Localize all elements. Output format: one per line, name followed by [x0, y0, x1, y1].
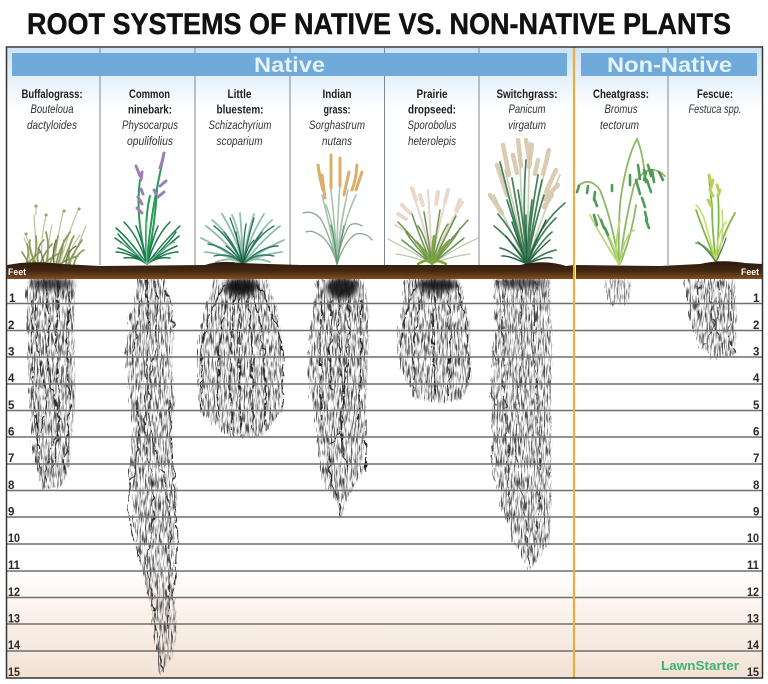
roots: Cheatgrass [606, 279, 632, 305]
roots: Little bluestem [198, 278, 284, 437]
banner: Non-Native [581, 53, 757, 77]
label: Indian grass [309, 87, 365, 148]
label: Common ninebark: ninebark: [128, 102, 172, 116]
label: Switchgrass: virgatum [508, 118, 546, 132]
feet scale: left: 13 [8, 614, 20, 626]
soil band [7, 261, 762, 279]
banner: Native [12, 53, 567, 77]
label: Little bluestem [208, 87, 272, 148]
feet scale: left: 10 [8, 533, 20, 545]
feet scale: left: 1 [9, 293, 16, 305]
root systems [27, 277, 738, 675]
label: Switchgrass: Panicum [508, 102, 546, 116]
feet scale: right: 12 [747, 587, 759, 599]
feet scale: right: 14 [747, 640, 760, 652]
feet scale: right: 3 [753, 346, 759, 358]
banner: Native: Native [254, 54, 325, 77]
label: Prairie dropseed: heterolepis [408, 134, 456, 148]
label: Indian grass: Sorghastrum [309, 118, 365, 132]
feet scale: right [741, 267, 760, 679]
feet scale: left: 4 [8, 373, 15, 385]
label: Cheatgrass: tectorum [600, 118, 639, 132]
feet scale: right: 15 [747, 667, 760, 679]
feet scale: right: Feet [741, 267, 759, 277]
label: Cheatgrass: Bromus [604, 102, 638, 116]
banner: Non-Native: Non-Native [607, 54, 732, 77]
feet scale: right: 10 [747, 533, 759, 545]
label: Prairie dropseed: dropseed: [408, 102, 456, 116]
plant: Indian grass [303, 155, 372, 264]
label: Common ninebark: opulifolius [127, 134, 173, 148]
plant: Fescue [696, 175, 735, 262]
label: Little bluestem: bluestem: [216, 102, 264, 116]
feet scale: left: 14 [8, 640, 21, 652]
feet scale: left: 8 [8, 480, 15, 492]
feet scale: left: 12 [8, 587, 20, 599]
feet scale: left: 15 [8, 667, 21, 679]
label: Common ninebark: Physocarpus [122, 118, 178, 132]
label: Common ninebark [122, 87, 178, 148]
label: Little bluestem: Schizachyrium [208, 118, 272, 132]
feet scale: left: 2 [8, 320, 14, 332]
label: Indian grass: nutans [322, 134, 352, 148]
roots: Common ninebark [125, 279, 178, 675]
plant: Little bluestem [201, 213, 284, 264]
plant: Cheatgrass [577, 139, 665, 264]
label: Switchgrass [496, 87, 558, 132]
orange native divider [573, 47, 575, 678]
feet scale: right: 13 [747, 614, 759, 626]
label: Buffalograss [22, 87, 82, 132]
feet scale: right: 7 [753, 453, 759, 465]
label: Cheatgrass: Cheatgrass: [593, 87, 649, 101]
feet scale: right: 4 [753, 373, 760, 385]
label: Little bluestem: scoparium [216, 134, 262, 148]
feet scale: right: 5 [753, 400, 760, 412]
feet scale: left: 9 [8, 506, 14, 518]
roots: Indian grass [308, 277, 370, 517]
depth grid lines [7, 304, 762, 651]
roots: Switchgrass [491, 278, 553, 570]
plant: Prairie dropseed [388, 188, 478, 264]
label: Indian grass: grass: [324, 102, 350, 116]
label: Common ninebark: Common [129, 87, 170, 101]
feet scale: left: 7 [8, 453, 14, 465]
feet scale: right: 11 [747, 560, 760, 572]
label: Buffalograss: Buffalograss: [22, 87, 82, 101]
label: Prairie dropseed: Sporobolus [408, 118, 456, 132]
plant: Buffalograss [22, 206, 86, 264]
label: Prairie dropseed [408, 87, 456, 148]
feet scale: left: 11 [8, 560, 21, 572]
feet scale: right: 2 [753, 320, 759, 332]
label: Buffalograss: dactyloides [27, 118, 77, 132]
plant: Switchgrass [490, 140, 565, 264]
label: Fescue: Fescue: [697, 87, 733, 101]
label: Prairie dropseed: Prairie [416, 87, 448, 101]
label: Fescue [688, 87, 742, 116]
feet scale: left [8, 267, 26, 679]
label: Cheatgrass [593, 87, 649, 132]
logo: LawnStarter: LawnStarter [661, 658, 739, 673]
feet scale: right: 8 [753, 480, 760, 492]
plant: Common ninebark [115, 153, 180, 264]
roots: Fescue [685, 279, 738, 358]
feet scale: left: 5 [8, 400, 15, 412]
label: Fescue: Festuca spp. [688, 102, 742, 116]
feet scale: left: 3 [8, 346, 14, 358]
feet scale: left: 6 [8, 426, 14, 438]
roots: Buffalograss [27, 278, 76, 490]
label: Indian grass: Indian [322, 87, 352, 101]
label: Little bluestem: Little [228, 87, 252, 101]
label: Buffalograss: Bouteloua [30, 102, 74, 116]
roots: Prairie dropseed [398, 278, 472, 402]
feet scale: right: 9 [753, 506, 759, 518]
plant labels [22, 87, 742, 148]
feet scale: left: Feet [8, 267, 26, 277]
feet scale: right: 1 [753, 293, 760, 305]
label: Switchgrass: Switchgrass: [496, 87, 558, 101]
feet scale: right: 6 [753, 426, 759, 438]
